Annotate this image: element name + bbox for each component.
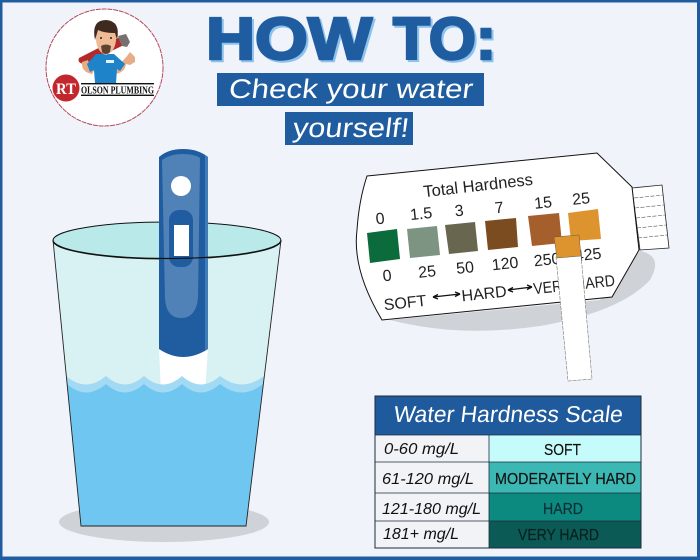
table: water hardness scale [375, 396, 641, 548]
title: HOW TO: TO: [393, 6, 496, 72]
row: hard [375, 493, 641, 521]
glass of water with test pen [53, 149, 281, 542]
title: HOW TO: HOW [208, 8, 374, 74]
row: very hard: VERY HARD [518, 527, 599, 544]
colour swatches [367, 209, 601, 263]
top scale numbers: 1.5 [409, 205, 433, 224]
top scale numbers: 25 [571, 190, 591, 209]
icon: plumber figure [82, 20, 135, 83]
row: soft: 0-60 mg/L [384, 441, 459, 458]
title: HOW TO: HOW [206, 6, 372, 72]
test strip bottle [356, 153, 669, 381]
bottom scale numbers: 0 [382, 268, 393, 285]
top scale numbers: 3 [454, 203, 465, 220]
glass body [53, 240, 281, 526]
water body [67, 384, 263, 526]
subtitle line 2: yourself! [291, 112, 411, 143]
bottle cap [632, 185, 669, 250]
row: soft [375, 435, 641, 462]
glass side outlines [53, 240, 281, 526]
top scale numbers: 0 [375, 211, 386, 228]
bottom scale numbers: 250 [533, 251, 561, 270]
glass rim opening [53, 222, 281, 259]
test strip [554, 235, 592, 381]
logo wordmark: OLSON PLUMBING [81, 84, 154, 96]
row: moderately hard [375, 462, 641, 493]
top scale numbers: 15 [533, 194, 553, 213]
icon: wrench [79, 34, 130, 64]
bottom scale numbers: 25 [417, 263, 437, 282]
row: very hard [375, 521, 641, 548]
title: HOW TO [206, 6, 498, 74]
row: very hard: 181+ mg/L [383, 526, 459, 543]
row: hard: HARD [543, 501, 583, 518]
row: hard: 121-180 mg/L [382, 501, 481, 518]
table header: Water Hardness Scale [392, 401, 625, 427]
test pen [159, 149, 208, 392]
top scale numbers: 7 [494, 200, 505, 217]
water wave crest [66, 376, 264, 526]
title: HOW TO: TO: [395, 8, 498, 74]
subtitle line 1: Check your water [227, 73, 475, 104]
hardness labels with arrows: HARD [461, 284, 508, 305]
table header [375, 396, 641, 435]
bottom scale numbers: 120 [491, 255, 519, 274]
row: soft: SOFT [544, 442, 581, 459]
glass rim front edge [53, 240, 281, 258]
icon: RT badge: RT [56, 81, 76, 98]
hardness labels with arrows [383, 273, 616, 314]
hardness labels with arrows: VERY HARD [532, 273, 616, 298]
bottom scale numbers [382, 246, 602, 285]
logo: RT Olson Plumbing [46, 9, 163, 126]
row: moderately hard: 61-120 mg/L [382, 471, 474, 488]
glass shadow [59, 502, 269, 542]
bottle body [356, 153, 639, 320]
top scale numbers [375, 190, 591, 228]
bottom scale numbers: 425 [574, 246, 602, 265]
bottle shadow [390, 251, 655, 331]
heading: Total Hardness: Total Hardness [422, 171, 534, 201]
hardness labels with arrows: SOFT [383, 293, 427, 314]
bottom scale numbers: 50 [455, 259, 475, 278]
row: moderately hard: MODERATELY HARD [495, 471, 636, 488]
